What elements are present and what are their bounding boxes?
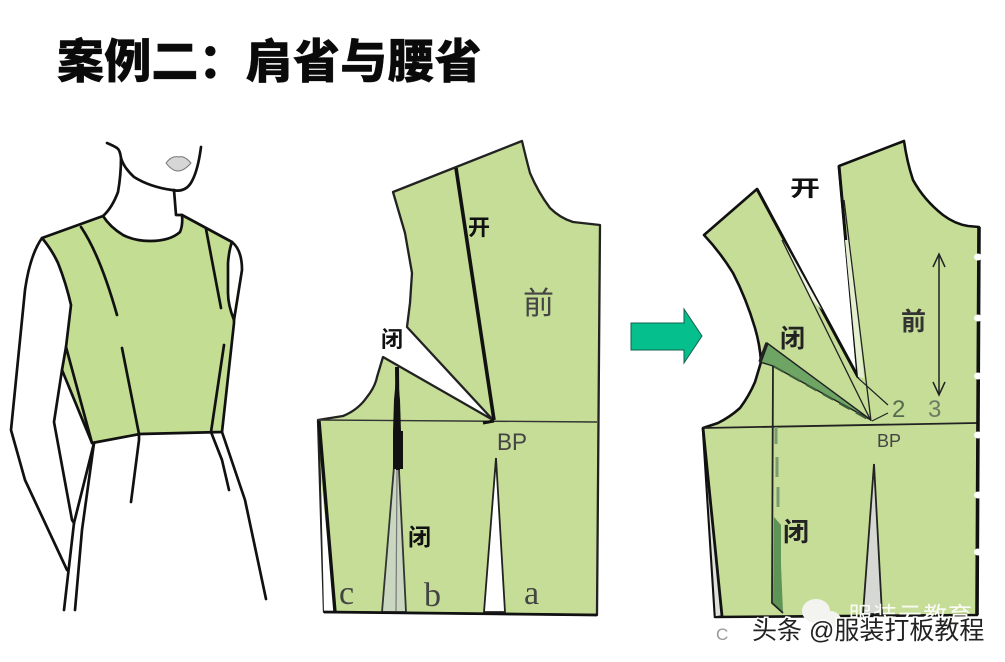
label: BP: BP — [877, 431, 901, 451]
thick centre front edge — [977, 227, 979, 615]
label: 3: 3 — [928, 396, 941, 423]
closed vertical dart — [773, 517, 783, 612]
opened dart fold lines — [782, 200, 871, 421]
closed armhole dart — [760, 343, 871, 420]
waist dart a — [863, 464, 882, 614]
open line — [456, 168, 494, 420]
title: 案例二：肩省与腰省 — [57, 35, 482, 88]
side dart c — [321, 480, 335, 612]
label: BP: BP — [497, 429, 527, 456]
vertical dart dashes — [776, 427, 778, 507]
bodice darts — [81, 227, 117, 315]
side dart c — [703, 428, 722, 617]
bust line — [703, 423, 977, 428]
centre pattern body — [318, 141, 600, 615]
dart corner — [760, 343, 767, 362]
face and neck — [107, 143, 201, 191]
slit edges of opened dart — [757, 166, 858, 377]
bottom edge — [324, 612, 597, 615]
label: open: 开 — [790, 176, 820, 201]
left arm — [11, 238, 67, 570]
bust line — [318, 420, 597, 422]
label: a: a — [524, 575, 539, 612]
label: closed, armhole: 闭 — [381, 327, 403, 352]
watermark — [752, 599, 984, 645]
vertical dart line — [772, 366, 783, 613]
grain arrow — [933, 254, 945, 395]
label: b: b — [424, 577, 441, 614]
pale slivers beside the opening — [783, 240, 822, 310]
leader lines to 2 and 3 — [858, 378, 888, 421]
dart a — [484, 458, 505, 612]
faded account name: 服装云教育 — [848, 603, 973, 630]
arrow — [631, 309, 702, 363]
centre pattern: original draft — [318, 141, 600, 615]
label: closed, waist: 闭 — [783, 517, 809, 547]
label: front: 前 — [523, 286, 554, 321]
bodice fill — [42, 215, 234, 443]
label: open: 开 — [468, 215, 490, 240]
bodice outline — [42, 215, 234, 443]
dart lower dashed edge — [773, 366, 871, 421]
label: c: c — [339, 575, 354, 612]
garment illustration: woman wearing bodice — [11, 143, 266, 610]
label: 2: 2 — [892, 396, 905, 423]
label: closed, waist: 闭 — [408, 524, 431, 550]
toutiao credit: 头条 @服装打板教程 — [752, 617, 984, 645]
lips — [166, 157, 191, 171]
centre labels — [339, 215, 554, 614]
wechat icon — [802, 599, 841, 629]
dart b, closed — [382, 430, 406, 612]
label: front: 前 — [901, 308, 926, 336]
skirt — [64, 443, 94, 610]
right pattern body — [703, 141, 979, 617]
label: closed, armhole: 闭 — [780, 325, 805, 353]
right pattern: transferred dart — [703, 141, 982, 644]
right labels — [716, 176, 941, 644]
label: c: C — [716, 625, 728, 644]
white gaps in centre front — [974, 254, 982, 556]
